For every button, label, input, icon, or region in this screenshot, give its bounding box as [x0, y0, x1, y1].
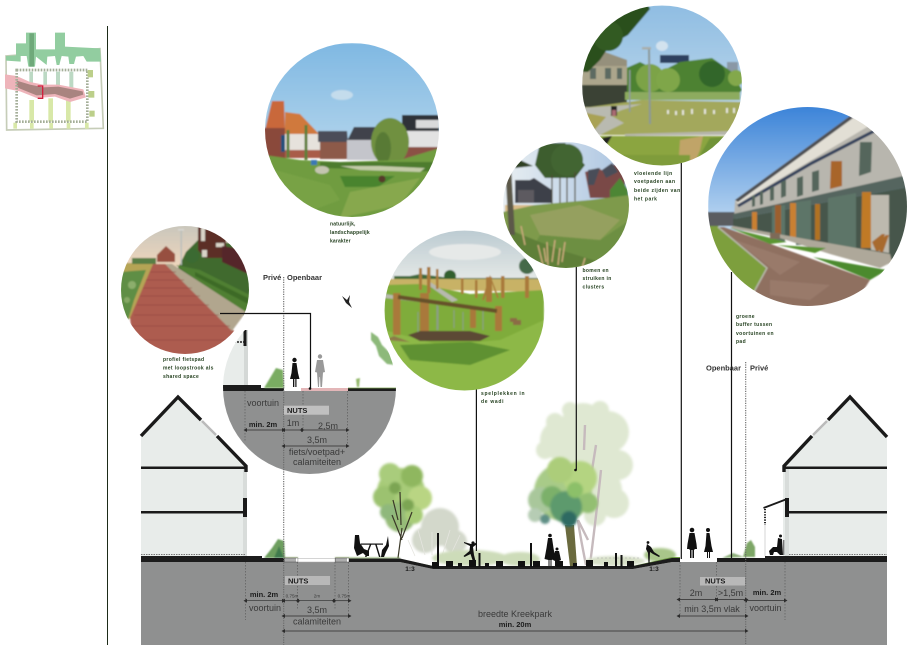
pale tree [536, 401, 633, 565]
slope labels: 1:3 [405, 566, 415, 573]
dimensions: park width [285, 609, 745, 631]
caption: voetpaden: vloeiende lijn [634, 171, 673, 177]
dimensions: park width: breedte Kreekpark [478, 609, 553, 619]
dimensions: right: voortuin [749, 603, 782, 613]
detail shrub [264, 368, 360, 388]
caption: fietspad: profiel fietspad [163, 357, 204, 363]
photo: fietspad [120, 225, 250, 360]
section ground [141, 556, 887, 645]
adult and child [544, 534, 561, 566]
two walkers [687, 528, 713, 558]
photo: speelplek [384, 230, 546, 395]
label: openbaar prive right: Privé [750, 364, 768, 372]
seated person [769, 534, 784, 555]
wadi stepping blocks and posts [432, 533, 634, 568]
vertical divider [106, 26, 108, 645]
dimensions: detail section: NUTS [287, 406, 307, 415]
dimensions: left: 2m [314, 594, 320, 598]
dimensions: detail section: voortuin [247, 398, 279, 408]
left house [141, 396, 247, 556]
label: openbaar prive right: Openbaar [706, 364, 741, 372]
right house [764, 396, 887, 556]
dimensions: detail section: min. 2m [249, 420, 278, 429]
picnic group [354, 535, 389, 557]
slope labels: 1:3 [649, 566, 659, 573]
dimensions: detail section: calamiteiten [293, 457, 341, 467]
label: prive openbaar left: Openbaar [287, 273, 322, 282]
dimensions: detail section: fiets/voetpad+ [289, 447, 345, 457]
caption: voetpaden: het park [634, 196, 657, 202]
caption: fietspad: met loopstrook als [163, 366, 214, 372]
caption: speelplekken: de wadi [481, 399, 504, 405]
boundary lines [284, 277, 746, 645]
leader lines [476, 163, 732, 559]
dimensions: detail section: 2,5m [318, 421, 338, 431]
caption: buffer: pad [736, 339, 746, 345]
dimensions: right: 2m [690, 588, 702, 598]
grey figure [315, 354, 325, 387]
people in the section [354, 528, 784, 566]
dimensions: left: min. 2m [250, 590, 279, 599]
dimensions: detail section: 1m [287, 418, 299, 428]
dimensions: left: 0.75m [286, 594, 299, 598]
small shrubs [264, 539, 755, 558]
dimensions: left: 0.75m [338, 594, 351, 598]
caption: bomen: struiken in [582, 276, 612, 282]
caption: natuurlijk: landschappelijk [330, 230, 370, 236]
dimensions: left: 3,5m [307, 605, 327, 615]
caption: buffer: groene [736, 314, 755, 320]
caption: fietspad: shared space [163, 374, 199, 380]
dimensions: left: calamiteiten [293, 616, 341, 626]
caption: bomen: bomen en [582, 268, 609, 274]
caption: bomen: clusters [582, 284, 604, 290]
caption: natuurlijk: natuurlijk, [330, 222, 356, 228]
dimensions: right: min. 2m [753, 588, 782, 597]
dimensions: left: voortuin [249, 603, 281, 613]
detail leader [220, 314, 311, 390]
caption: buffer: buffer tussen [736, 322, 772, 328]
detail leaves [371, 332, 395, 365]
bird [342, 295, 352, 308]
dimensions: right: min 3,5m vlak [684, 604, 740, 614]
wadi planting [400, 548, 680, 568]
dimensions: left [246, 562, 351, 626]
dimensions: left: NUTS [288, 576, 308, 586]
kicking child [464, 541, 477, 563]
dimensions: park width: min. 20m [499, 620, 532, 629]
caption: buffer: voortuinen en [736, 331, 774, 337]
caption: voetpaden: beide zijden van [634, 188, 681, 194]
photo: vloeiende voetpaden [582, 5, 744, 170]
photo: bomen en struiken [500, 142, 630, 270]
left tree with shrub [373, 463, 467, 558]
dimensions: right [680, 562, 785, 620]
black figure [290, 358, 300, 387]
green tree [528, 457, 598, 566]
dimensions: right: NUTS [705, 576, 725, 586]
detail section circle [223, 330, 396, 474]
key map [5, 33, 103, 130]
caption: voetpaden: voetpaden aan [634, 179, 676, 185]
caption: natuurlijk: karakter [330, 239, 351, 245]
caption: speelplekken: spelplekken in [481, 391, 525, 397]
label: prive openbaar left: Privé [263, 273, 281, 282]
photo: natuurlijk karakter [264, 43, 440, 220]
dimensions: detail section [245, 391, 348, 467]
dimensions: detail section: 3,5m [307, 435, 327, 445]
kicking child right [646, 541, 660, 564]
dimensions: right: >1,5m [718, 588, 743, 598]
photo: groene buffer [706, 106, 908, 312]
